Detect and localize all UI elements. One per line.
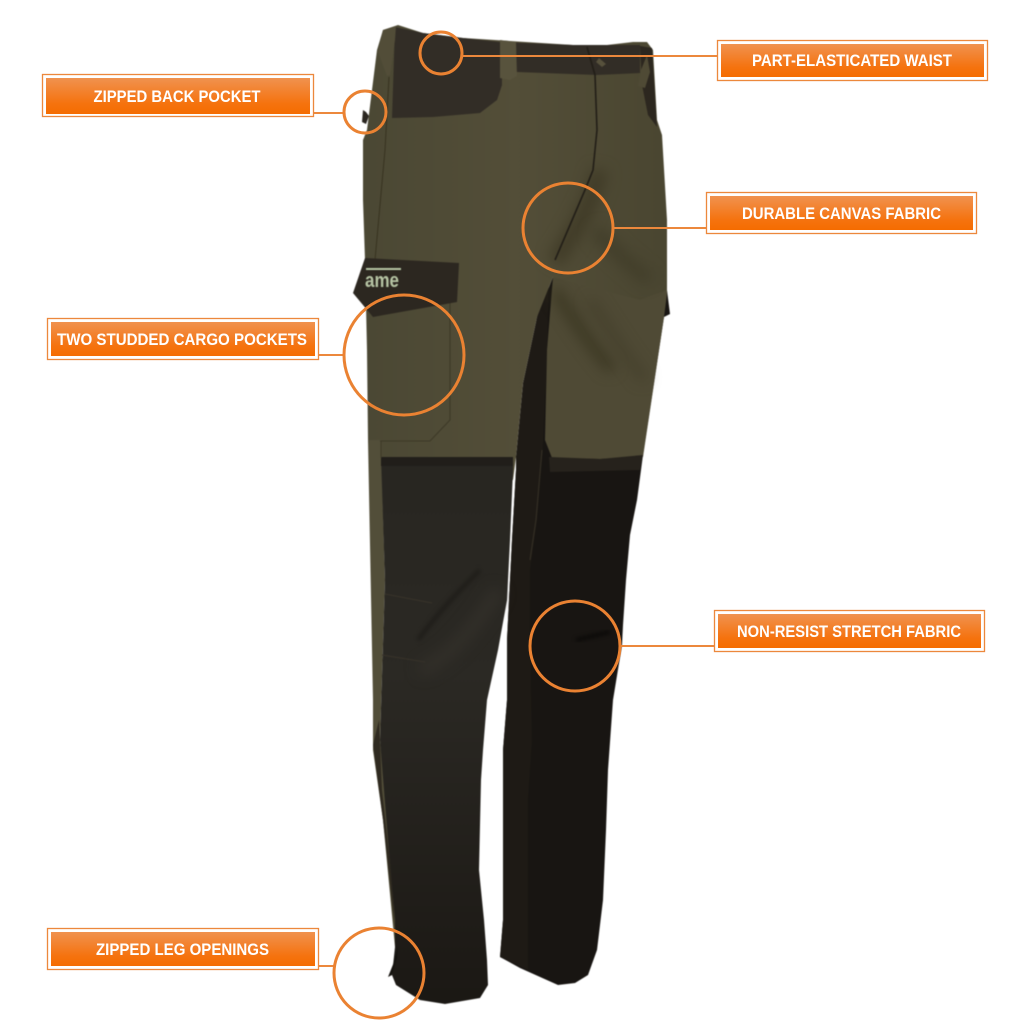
callout: non-resist stretch fabric	[530, 601, 984, 691]
callout: two studded cargo pockets: TWO STUDDED CARGO POCKETS	[57, 330, 307, 349]
callout: two studded cargo pockets	[48, 295, 464, 415]
right leg	[500, 250, 670, 985]
callout: durable canvas fabric	[523, 183, 976, 273]
callout: non-resist stretch fabric: NON-RESIST STRETCH FABRIC	[737, 622, 961, 641]
callout: durable canvas fabric: DURABLE CANVAS FABRIC	[742, 204, 941, 223]
callout: zipped back pocket	[42, 74, 386, 133]
yoke and waistband	[362, 26, 657, 260]
callout: part-elasticated waist	[420, 32, 988, 80]
cargo pocket	[353, 258, 459, 458]
main olive body	[363, 25, 667, 480]
callout: zipped leg openings	[48, 928, 424, 1018]
callout: zipped back pocket: ZIPPED BACK POCKET	[94, 87, 261, 106]
callout: zipped leg openings: ZIPPED LEG OPENINGS	[96, 940, 269, 959]
left leg lower	[368, 440, 513, 1004]
callout: part-elasticated waist: PART-ELASTICATED WAIST	[752, 51, 953, 70]
product photo: trousers	[353, 25, 670, 1004]
logo on flap: ame	[365, 270, 399, 292]
